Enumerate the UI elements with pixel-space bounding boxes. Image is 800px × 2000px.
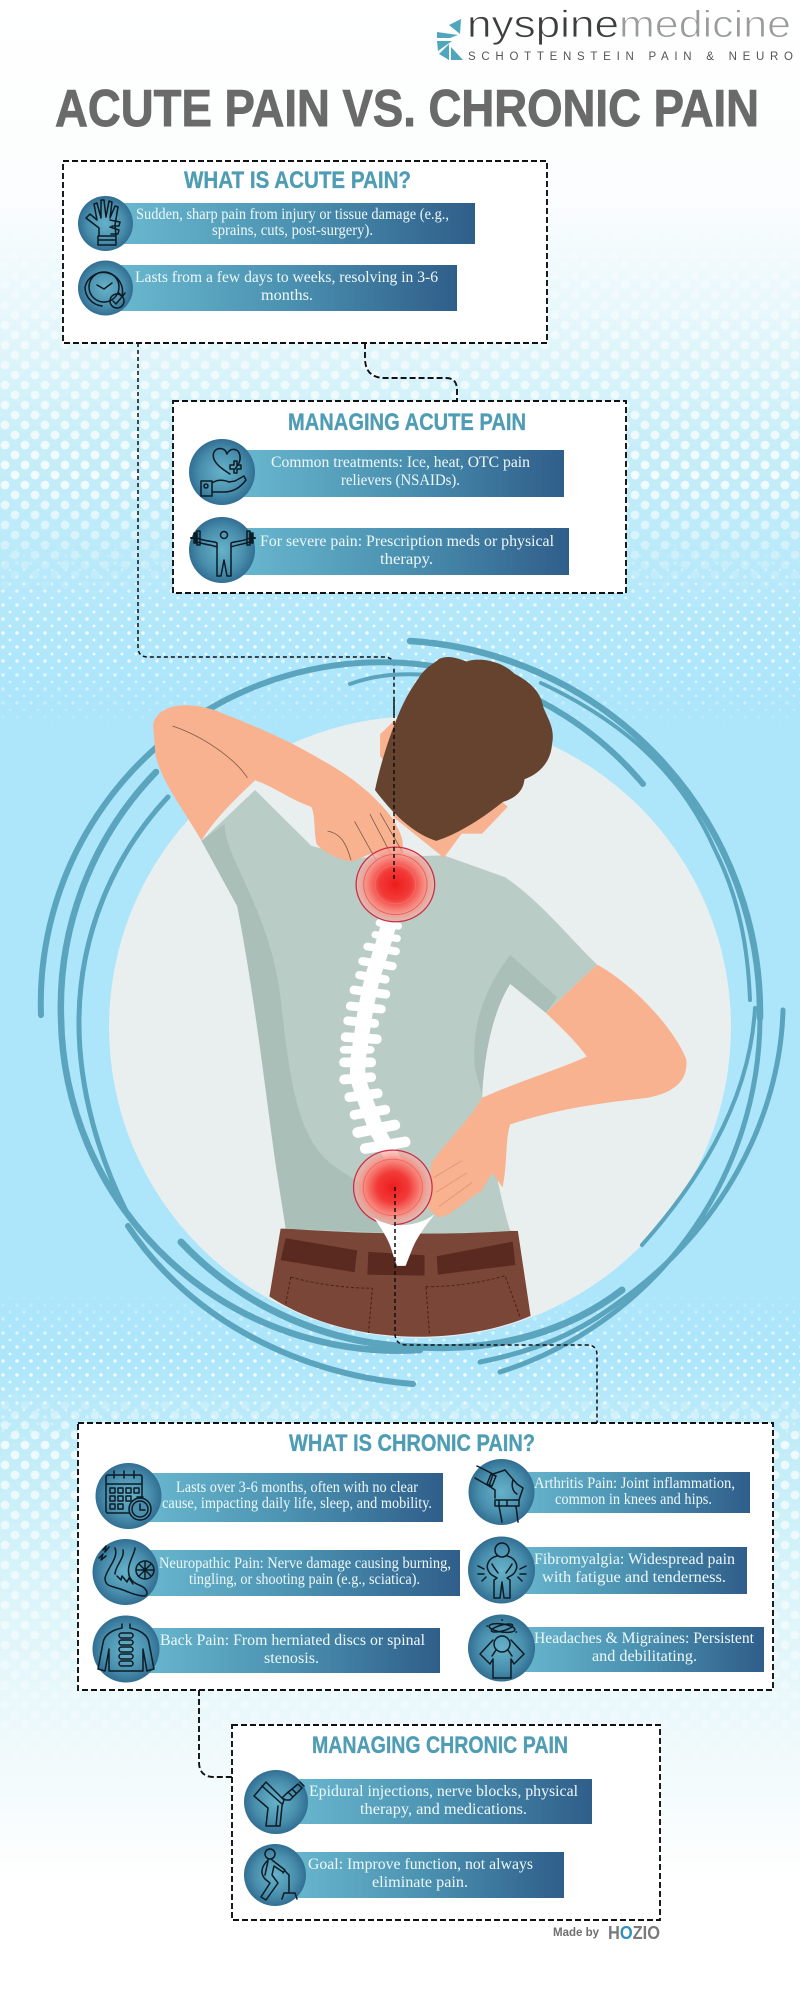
item: back pain: stenosis.: [264, 1650, 319, 1667]
swirling rings: [41, 641, 783, 1384]
icon: headache person: [480, 1620, 524, 1678]
pants: [269, 1229, 531, 1337]
connector: lower pain point to chronic: [395, 1187, 597, 1423]
item: lasts over months: [96, 1463, 443, 1529]
item: neuropathic pain: tingling, or shooting pain (e.g., sciatica).: [189, 1571, 420, 1588]
item: back pain: Back Pain: From herniated discs or spinal: [160, 1632, 425, 1649]
icon: aching person: [478, 1543, 526, 1598]
logo wordmark: nyspine: [467, 4, 619, 46]
item: neuropathic pain: Neuropathic Pain: Nerve damage causing burning,: [159, 1555, 451, 1572]
logo: [437, 4, 793, 63]
icon: injection in knee: [254, 1782, 304, 1826]
item: goal: Goal: Improve function, not always: [308, 1856, 533, 1873]
icon: knee: [475, 1466, 523, 1522]
connector: acute to upper pain point: [138, 343, 394, 882]
logo tagline: SCHOTTENSTEIN PAIN & NEURO: [468, 51, 793, 63]
spine: [339, 919, 411, 1163]
icon: heart in hand: [201, 448, 246, 496]
icon: person with cane: [261, 1849, 297, 1900]
item: neuropathic pain: [92, 1539, 460, 1605]
sacrum: [374, 1214, 435, 1266]
neck and ear: [380, 720, 508, 858]
illustration: person with back pain: [153, 657, 686, 1337]
page background: [0, 223, 800, 1814]
shirt: [202, 790, 597, 1234]
shirt shading: [202, 824, 557, 1233]
item: headaches: Headaches & Migraines: Persistent: [534, 1630, 755, 1647]
footer credit: Made by: [553, 1927, 600, 1939]
heading: MANAGING CHRONIC PAIN: [312, 1732, 568, 1759]
panel: managing acute pain: [173, 401, 626, 593]
item: goal: eliminate pain.: [372, 1874, 468, 1891]
icon: calendar and stopwatch: [106, 1471, 151, 1520]
item: arthritis pain: [468, 1459, 750, 1525]
item: headaches: [468, 1614, 764, 1682]
item: sudden pain: sprains, cuts, post-surgery).: [212, 222, 373, 239]
lower pain point: [353, 1150, 433, 1225]
icon: logo pinwheel: [437, 19, 463, 60]
raised arm: [153, 705, 403, 863]
item: fibromyalgia: with fatigue and tenderness.: [542, 1569, 726, 1586]
item: fibromyalgia: [468, 1536, 747, 1604]
icon: nerve foot: [99, 1546, 154, 1596]
item: sudden pain: [78, 196, 475, 251]
item: arthritis pain: common in knees and hips.: [555, 1491, 712, 1508]
logo wordmark: [467, 4, 791, 46]
item: severe pain: [189, 517, 569, 583]
item: goal: [244, 1844, 564, 1906]
item: interventions: Epidural injections, nerve blocks, physical: [309, 1783, 578, 1800]
icon: clock: [85, 272, 125, 308]
item: severe pain: therapy.: [380, 551, 433, 568]
item: interventions: [244, 1770, 592, 1834]
item: duration: [78, 260, 457, 316]
connector: acute to managing acute: [365, 343, 457, 401]
hip arm and hand: [429, 964, 686, 1217]
item: interventions: therapy, and medications.: [360, 1801, 527, 1818]
panel: what is acute pain: [63, 161, 547, 343]
icon: weightlifter: [191, 531, 255, 576]
upper pain point: [356, 847, 435, 922]
item: back pain: [92, 1616, 440, 1682]
item: severe pain: For severe pain: Prescription meds or physical: [260, 533, 554, 550]
backdrop circle: [109, 716, 731, 1338]
item: lasts over months: Lasts over 3-6 months, often with no clear: [176, 1479, 419, 1496]
arm lines: [172, 726, 403, 868]
footer credit: HOZIO: [608, 1923, 660, 1943]
item: common treatments: relievers (NSAIDs).: [341, 472, 460, 489]
panel: what is chronic pain: [78, 1423, 773, 1690]
upper connector overlay: [393, 700, 395, 882]
item: lasts over months: cause, impacting daily life, sleep, and mobility.: [162, 1495, 432, 1512]
footer credit: [553, 1923, 660, 1943]
item: common treatments: [189, 439, 564, 505]
item: fibromyalgia: Fibromyalgia: Widespread pain: [534, 1551, 735, 1568]
hair: [375, 657, 553, 841]
item: headaches: and debilitating.: [592, 1648, 697, 1665]
item: duration: months.: [261, 287, 313, 304]
item: duration: Lasts from a few days to weeks, resolving in 3-6: [135, 269, 438, 286]
heading: MANAGING ACUTE PAIN: [288, 409, 526, 436]
item: arthritis pain: Arthritis Pain: Joint inflammation,: [534, 1475, 735, 1492]
icon: gloved hand: [86, 200, 120, 245]
icon: spine in back: [98, 1624, 154, 1671]
heading: WHAT IS CHRONIC PAIN?: [289, 1430, 535, 1457]
connector: chronic to managing chronic: [199, 1690, 232, 1777]
panel: managing chronic pain: [232, 1725, 660, 1920]
item: sudden pain: Sudden, sharp pain from injury or tissue damage (e.g.,: [136, 206, 449, 223]
logo wordmark: medicine: [619, 4, 791, 46]
hand lines: [434, 1161, 472, 1207]
item: common treatments: Common treatments: Ice, heat, OTC pain: [271, 454, 530, 471]
heading: WHAT IS ACUTE PAIN?: [184, 167, 411, 194]
